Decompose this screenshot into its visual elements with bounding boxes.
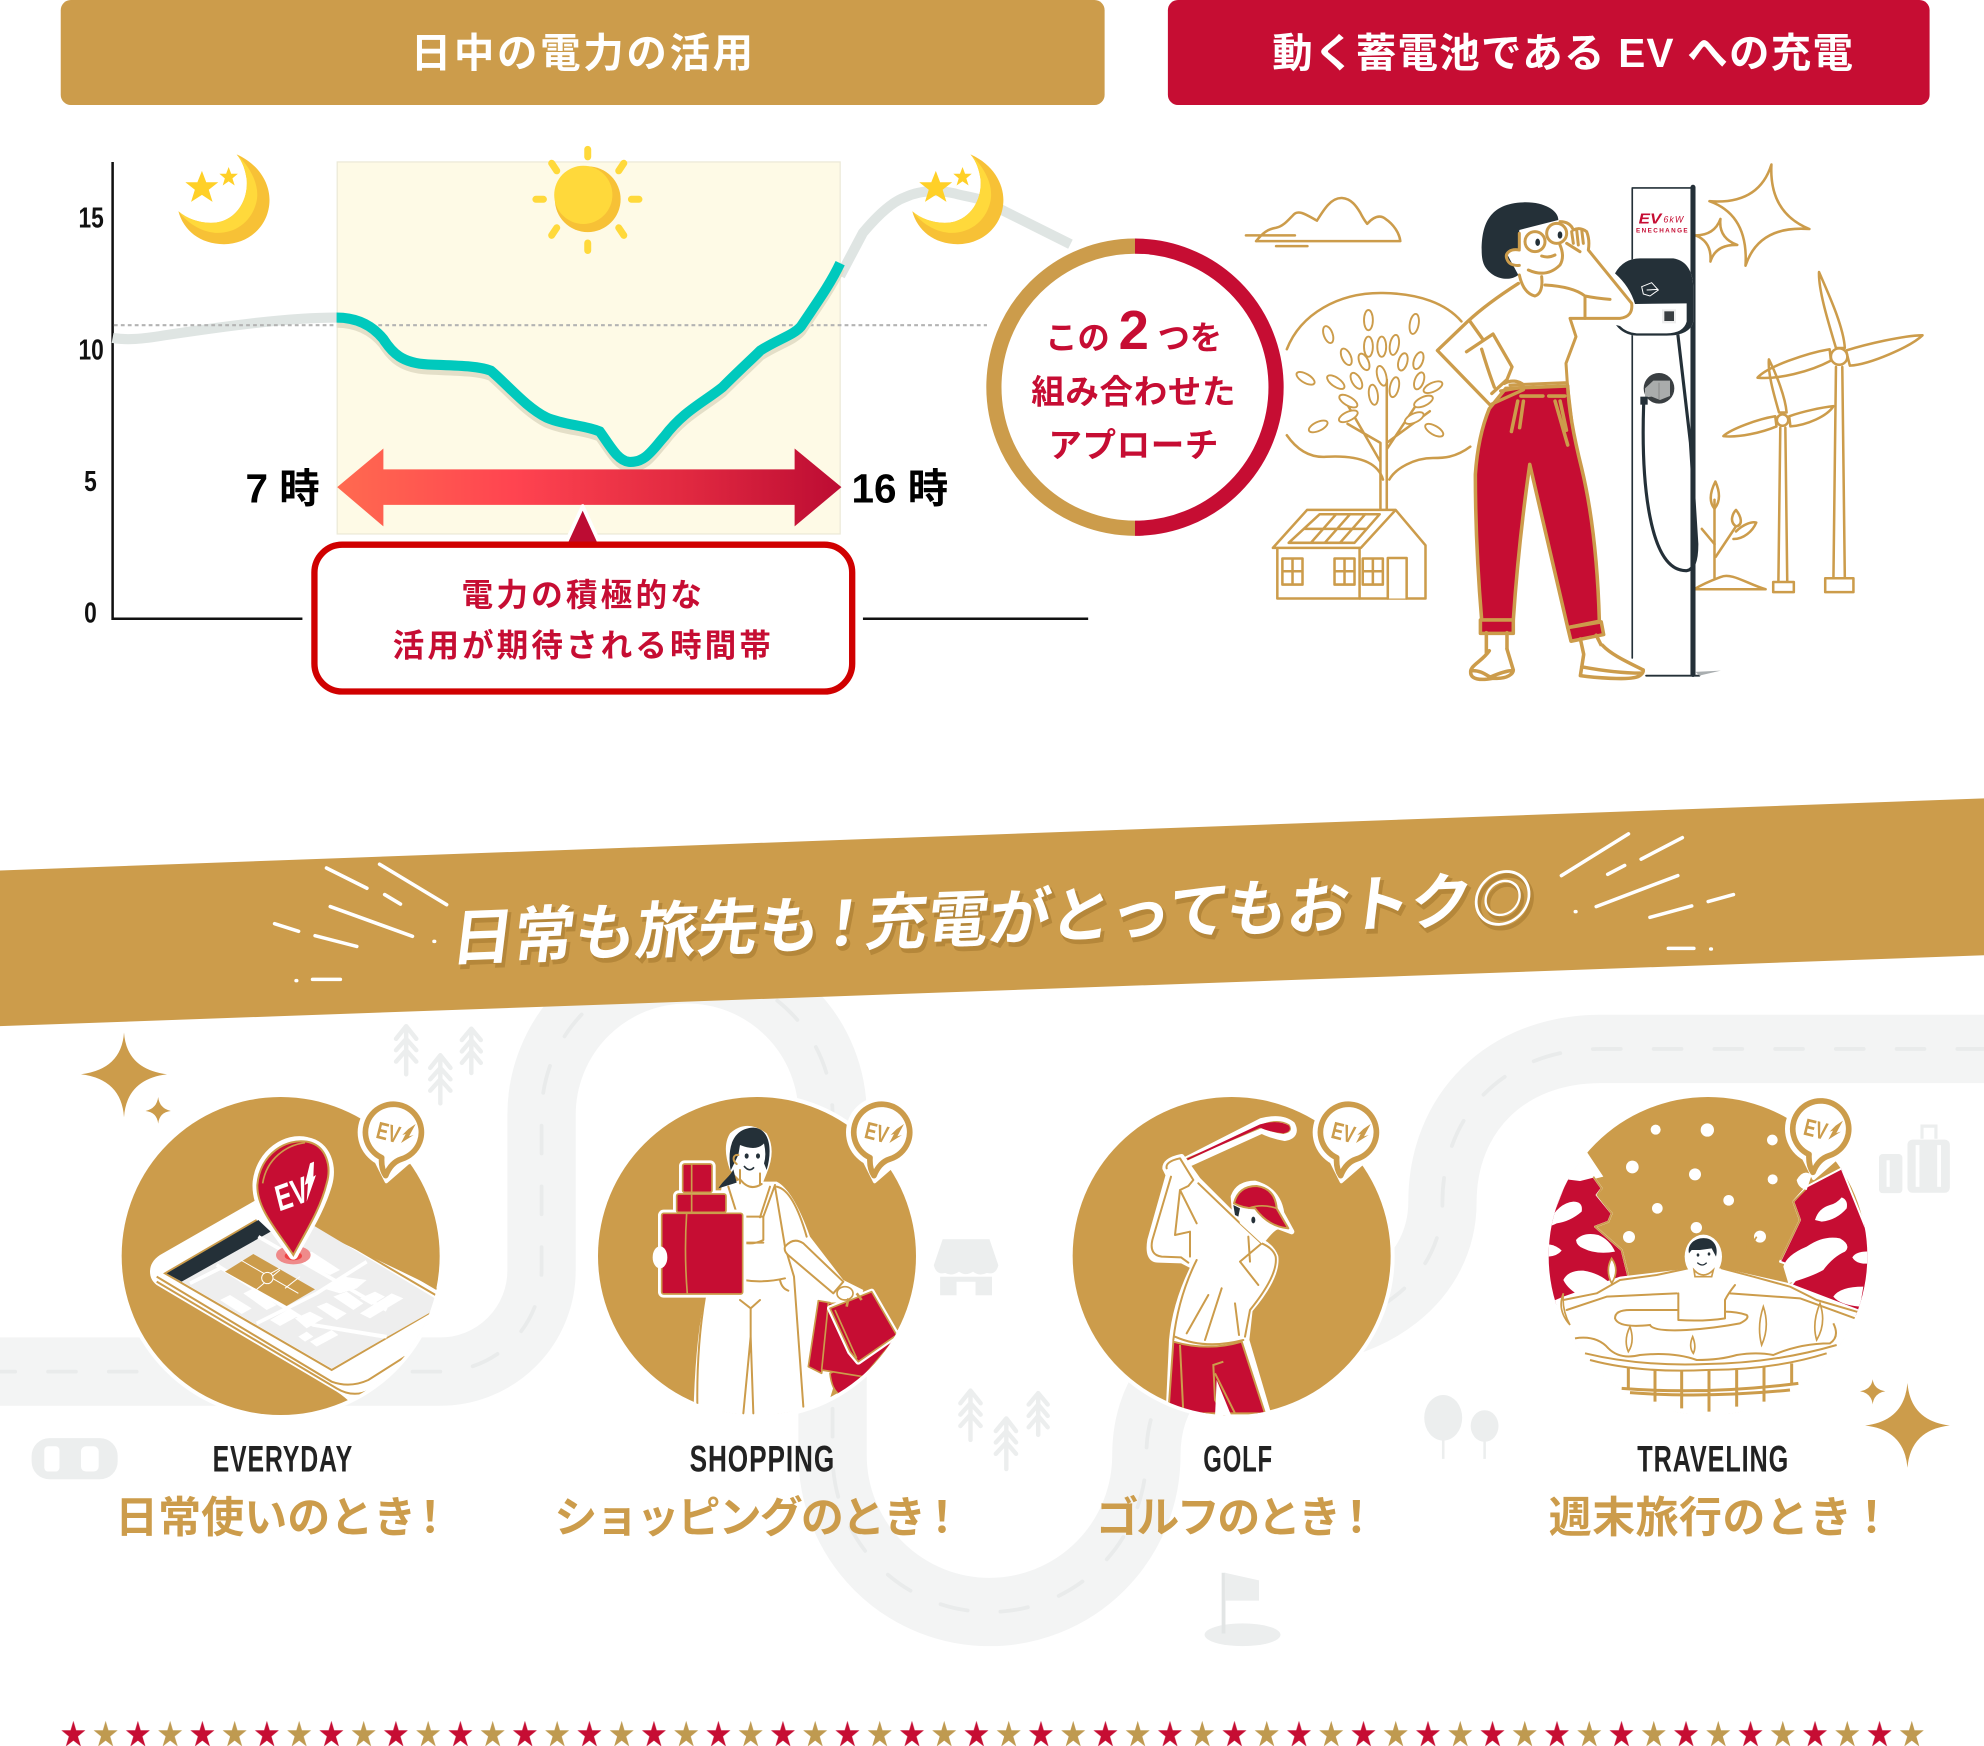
banner text: 日常も旅先も！充電がとってもおトク◎ bbox=[448, 865, 1537, 974]
callout box bbox=[314, 545, 852, 691]
map streets bbox=[190, 1237, 387, 1337]
axis numbers: 15 bbox=[78, 203, 104, 235]
caption: golf: ゴルフのとき！ bbox=[1096, 1494, 1375, 1542]
bag middle bbox=[822, 1303, 892, 1377]
demand line, outside band bbox=[113, 191, 1070, 339]
label: 7時: 7 時 bbox=[245, 465, 320, 511]
fence bbox=[1622, 1363, 1798, 1412]
axis numbers: 0 bbox=[84, 598, 97, 630]
badge: combine the two: 組み合わせた bbox=[1031, 375, 1236, 412]
map pin bbox=[257, 1141, 329, 1255]
illustration: scenery around the woman bbox=[1246, 164, 1923, 676]
charger logo: EV bbox=[1639, 211, 1663, 227]
heading: daytime power: 日中の電力の活用 bbox=[411, 30, 756, 76]
speech bubble EV mark: EV bbox=[374, 1117, 403, 1149]
woman: legs and shoes bbox=[1486, 633, 1601, 654]
caption: everyday bbox=[115, 1439, 452, 1542]
axis numbers: 10 bbox=[78, 334, 104, 366]
icon: small wind turbine bbox=[1723, 359, 1833, 592]
icon: cloud bbox=[1246, 198, 1400, 246]
caption: everyday: 日常使いのとき！ bbox=[115, 1494, 452, 1542]
callout text: 電力の積極的な bbox=[462, 577, 705, 613]
bag lower bbox=[829, 1363, 875, 1394]
axis lines bbox=[113, 162, 1088, 619]
caption: golf bbox=[1096, 1439, 1375, 1542]
gold disc bbox=[598, 1097, 916, 1415]
icon: tree bbox=[1287, 293, 1470, 510]
banner speed lines, left bbox=[275, 864, 447, 981]
background icons: pale map symbols bbox=[32, 1026, 1950, 1646]
caption: traveling bbox=[1549, 1439, 1893, 1542]
golfer silhouette bbox=[1149, 1157, 1292, 1413]
speech bubble EV mark bbox=[1785, 1093, 1856, 1178]
woman: lower body and bent arm bbox=[1437, 283, 1643, 679]
trousers bbox=[1168, 1342, 1265, 1413]
snow on left corner bbox=[1570, 1152, 1604, 1179]
row of stars bbox=[57, 1721, 1928, 1746]
bather head bbox=[1685, 1235, 1722, 1279]
hand bbox=[837, 1287, 853, 1300]
icon group: everyday, map pin on smartphone bbox=[118, 1093, 450, 1420]
charger logo: ENECHANGE bbox=[1636, 227, 1688, 234]
callout pointer bbox=[563, 506, 602, 549]
speech bubble EV mark: EV bbox=[1801, 1114, 1830, 1146]
face bbox=[697, 1155, 843, 1413]
icon: pine trees upper bbox=[396, 1026, 481, 1103]
icon: moon left bbox=[178, 154, 270, 244]
callout: time of active use bbox=[314, 506, 852, 691]
icon: sprout bbox=[1694, 482, 1766, 589]
label: 16時: 16 時 bbox=[852, 465, 948, 511]
body silhouette bbox=[693, 1126, 863, 1420]
smartphone body bbox=[150, 1200, 436, 1400]
banner text shadow: 日常も旅先も！充電がとってもおトク◎ bbox=[451, 869, 1540, 978]
eyes bbox=[1535, 231, 1562, 246]
woman: upper body and charger head bbox=[1437, 202, 1693, 420]
badge: combine the two: アプローチ bbox=[1048, 428, 1219, 465]
shirt bbox=[1437, 250, 1632, 403]
caption: shopping: SHOPPING bbox=[690, 1439, 835, 1480]
callout text: 活用が期待される時間帯 bbox=[393, 628, 774, 664]
sparkles, gold bbox=[81, 1032, 1950, 1468]
badge: combine the two: この2 つを bbox=[1045, 300, 1222, 361]
icon: sun bbox=[536, 149, 639, 251]
left tree red bbox=[1548, 1178, 1629, 1305]
caption: everyday: EVERYDAY bbox=[213, 1439, 353, 1480]
golf club bbox=[1168, 1120, 1293, 1169]
face features bbox=[744, 1153, 760, 1170]
woman: trousers bbox=[1471, 386, 1643, 679]
woman: bent left arm with folder bbox=[1437, 283, 1523, 405]
icon: large wind turbine bbox=[1758, 272, 1923, 592]
reference dotted line bbox=[114, 324, 987, 326]
icon: house with solar panel bbox=[1273, 510, 1425, 598]
charger head bbox=[1615, 258, 1693, 336]
icon: golf flag bbox=[1205, 1573, 1280, 1646]
gold disc bbox=[1073, 1097, 1391, 1415]
steam bbox=[1561, 1258, 1823, 1353]
heading: EV charging: 動く蓄電池である EV への充電 bbox=[1272, 30, 1854, 76]
heading: daytime power bbox=[61, 0, 1105, 105]
stack of boxes bbox=[654, 1164, 743, 1294]
hair and ponytail bbox=[718, 1128, 770, 1188]
icon group: golf, golfer in backswing bbox=[1069, 1093, 1395, 1419]
dark status bar bbox=[167, 1220, 271, 1282]
axis numbers: 5 bbox=[84, 466, 97, 498]
hair bbox=[1482, 202, 1558, 279]
gold disc bbox=[1549, 1097, 1867, 1415]
charger logo bbox=[1636, 211, 1688, 234]
icon: suitcases bbox=[1879, 1126, 1950, 1193]
icon: store bbox=[934, 1239, 998, 1295]
background: winding road bbox=[0, 969, 1984, 1612]
charging cable bbox=[1643, 334, 1697, 571]
bag rear bbox=[808, 1301, 830, 1373]
bath white base bbox=[1555, 1268, 1858, 1415]
icon group: shopping, woman with boxes and bags bbox=[594, 1093, 920, 1420]
icon: pine trees lower bbox=[960, 1391, 1048, 1469]
caption: traveling: TRAVELING bbox=[1637, 1439, 1789, 1480]
right tree red bbox=[1780, 1168, 1873, 1320]
icon: small sparkle bbox=[1695, 219, 1737, 262]
map block bbox=[225, 1254, 315, 1306]
axis numbers bbox=[78, 203, 104, 630]
charger plug bbox=[1640, 373, 1674, 405]
demand line shadow bbox=[337, 268, 840, 467]
chart: power use through the day bbox=[78, 149, 1088, 630]
caption: traveling: 週末旅行のとき！ bbox=[1549, 1494, 1893, 1542]
banner: everyday and travel savings bbox=[0, 798, 1984, 1026]
icon: round trees bbox=[1424, 1395, 1499, 1459]
caption: golf: GOLF bbox=[1203, 1439, 1273, 1480]
phone screen bbox=[182, 1223, 435, 1368]
gold disc bbox=[122, 1097, 440, 1415]
demand line, daytime dip bbox=[337, 263, 840, 462]
badge: combine the two bbox=[989, 242, 1280, 533]
speech bubble EV mark: EV bbox=[1329, 1117, 1358, 1149]
speech bubble EV mark bbox=[1313, 1097, 1384, 1182]
charger logo: 6kW bbox=[1663, 214, 1685, 224]
arrow: 7 to 16 o'clock window bbox=[337, 449, 841, 526]
golfer lines bbox=[1152, 1158, 1276, 1344]
cap and head bbox=[1233, 1186, 1288, 1243]
map pin: EV bbox=[271, 1168, 312, 1219]
daytime band bbox=[337, 162, 840, 534]
snow patches on trees bbox=[1547, 1173, 1870, 1307]
pointer dot bbox=[276, 1246, 311, 1264]
icon group: traveling, outdoor hot spring in snow bbox=[1540, 1093, 1877, 1420]
speech bubble EV mark bbox=[846, 1097, 917, 1182]
callout text bbox=[393, 577, 774, 664]
icon: charging post bbox=[1632, 187, 1721, 676]
icon: car bbox=[32, 1438, 118, 1479]
bag front bbox=[830, 1292, 897, 1362]
speech bubble EV mark bbox=[358, 1097, 429, 1182]
caption: shopping: ショッピングのとき！ bbox=[554, 1494, 962, 1542]
bather arms and bath rim bbox=[1563, 1268, 1857, 1321]
icon: large sparkle bbox=[1709, 164, 1809, 266]
icon: moon right bbox=[912, 154, 1003, 244]
banner speed lines, right bbox=[1561, 834, 1733, 949]
speech bubble EV mark: EV bbox=[862, 1117, 891, 1149]
map buildings bbox=[220, 1252, 403, 1347]
face and arm lines bbox=[1506, 222, 1632, 420]
snowflakes bbox=[1623, 1123, 1778, 1243]
heading: EV charging bbox=[1168, 0, 1930, 105]
caption: shopping bbox=[554, 1439, 962, 1542]
